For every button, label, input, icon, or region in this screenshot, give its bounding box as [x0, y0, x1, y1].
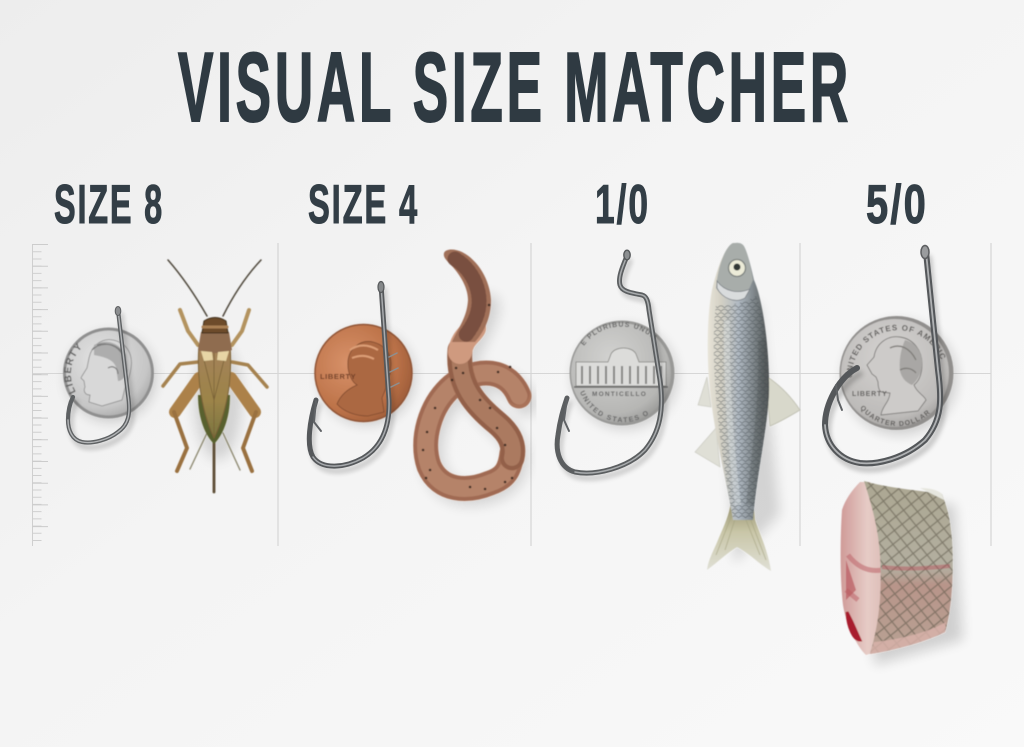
- bait: worm: [423, 250, 526, 494]
- head: [716, 243, 753, 300]
- bait: minnow: [695, 243, 800, 571]
- worm front body: [460, 350, 513, 458]
- front legs: [180, 310, 249, 345]
- label: 5/0: 5/0: [866, 173, 928, 235]
- tail fin: [707, 500, 771, 571]
- left fins: [695, 377, 720, 467]
- hook: 5/0: [825, 246, 943, 469]
- penny inscription: LIBERTY: [320, 372, 356, 381]
- label: 1/0: 1/0: [595, 173, 650, 235]
- ruler and section grid: [32, 243, 991, 547]
- coin: nickel: E PLURIBUS UNUM: [580, 322, 657, 346]
- coin: quarter: LIBERTY: [852, 391, 888, 398]
- antennae: [168, 260, 261, 316]
- thorax: [198, 330, 232, 353]
- head: [202, 318, 228, 333]
- eye: [728, 260, 746, 276]
- worm clitellum: [460, 328, 474, 352]
- label: size 4: SIZE 4: [308, 173, 419, 235]
- coin: quarter: QUARTER DOLLAR: [860, 406, 930, 426]
- soil specks: [423, 305, 512, 489]
- coin: nickel: [568, 320, 682, 434]
- coin: nickel: MONTICELLO: [592, 391, 647, 398]
- wings: [198, 345, 231, 438]
- bait: cricket: [163, 260, 267, 492]
- fish body: [708, 243, 769, 520]
- worm back loop and tail: [426, 373, 519, 488]
- coin: nickel: UNITED STATES OF: [580, 390, 648, 422]
- right fin: [766, 376, 800, 426]
- bait: cut fish chunk: [841, 481, 963, 665]
- coin: quarter: [838, 315, 962, 440]
- coin: dime: LIBERTY: [64, 342, 81, 394]
- hind legs: [175, 378, 199, 412]
- flesh side: [841, 482, 885, 655]
- abdomen: [198, 395, 230, 444]
- cerci and ovipositor: [190, 433, 240, 470]
- hook: 1/0: [557, 250, 664, 478]
- worm tapered head: [444, 250, 491, 342]
- coin: dime: [62, 326, 160, 426]
- hook: size 4: [309, 282, 399, 471]
- skin side with scales: [864, 481, 953, 654]
- label: size 8: SIZE 8: [54, 173, 164, 235]
- middle legs: [163, 362, 267, 387]
- hook: size 8: [68, 306, 132, 448]
- coin: quarter: UNITED STATES OF AMERICA: [846, 324, 946, 378]
- coin: penny: [315, 324, 415, 425]
